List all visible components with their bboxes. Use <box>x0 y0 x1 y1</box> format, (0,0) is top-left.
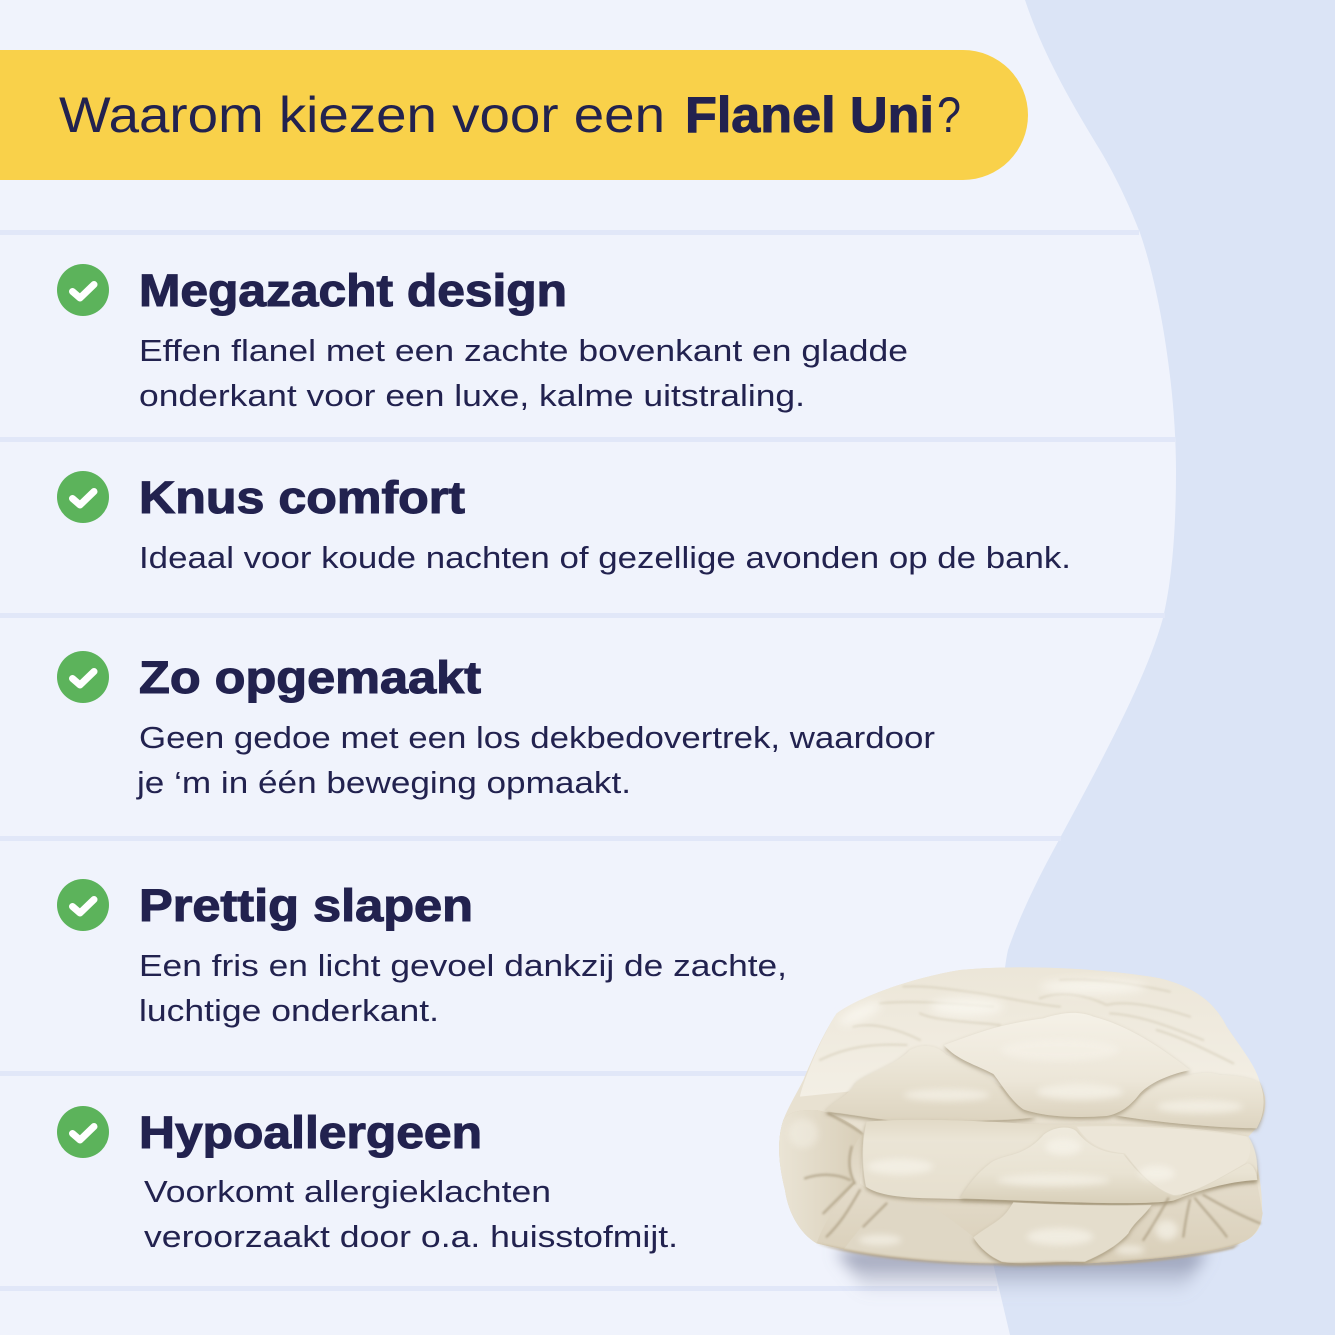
blanket big centre puff <box>944 1013 1190 1117</box>
blanket left pleats <box>805 1113 1260 1240</box>
body text <box>139 948 787 1028</box>
blanket upper right band <box>1113 1073 1264 1128</box>
folded blanket illustration <box>779 967 1265 1293</box>
body text <box>144 1174 678 1254</box>
separators <box>0 230 1175 1291</box>
blanket lower layer <box>779 1110 1263 1263</box>
title: Flanel Uni <box>685 87 934 143</box>
blanket lower edge shading <box>817 1243 1240 1265</box>
title: Waarom kiezen voor een <box>59 87 665 143</box>
body text: veroorzaakt door o.a. huisstofmijt. <box>144 1219 678 1254</box>
body text: Ideaal voor koude nachten of gezellige avonden op de bank. <box>139 540 1071 575</box>
body text: Effen flanel met een zachte bovenkant en gladde <box>139 333 908 368</box>
body text: Een fris en licht gevoel dankzij de zachte, <box>139 948 787 983</box>
item: Hypoallergeen <box>57 1106 678 1254</box>
heading: Knus comfort <box>139 472 465 523</box>
blanket middle front puff <box>960 1128 1257 1203</box>
blanket left roll end <box>779 1110 860 1243</box>
blanket top surface <box>800 967 1260 1097</box>
heading: Hypoallergeen <box>139 1107 482 1158</box>
blanket middle roll right surface <box>1077 1126 1250 1195</box>
body text: Voorkomt allergieklachten <box>144 1174 551 1209</box>
body text <box>136 720 935 800</box>
icon: check <box>57 879 109 931</box>
item: Prettig slapen <box>57 879 787 1028</box>
heading: Zo opgemaakt <box>139 652 481 703</box>
blanket middle roll left <box>863 1120 1257 1202</box>
item: Knus comfort <box>57 471 1071 575</box>
body text: onderkant voor een luxe, kalme uitstraling. <box>139 378 805 413</box>
blanket upper left band <box>825 1046 1037 1121</box>
title: ? <box>937 87 961 143</box>
body text: je ‘m in één beweging opmaakt. <box>136 765 631 800</box>
icon: check <box>57 1106 109 1158</box>
icon: check <box>57 471 109 523</box>
item: Zo opgemaakt <box>57 651 935 800</box>
blanket base silhouette <box>779 967 1265 1263</box>
heading: Prettig slapen <box>139 880 473 931</box>
blanket bottom centre puff <box>973 1202 1152 1263</box>
body text <box>139 333 908 413</box>
blanket shadow <box>837 1250 1207 1293</box>
title banner <box>0 50 1028 180</box>
icon: check <box>57 264 109 316</box>
item: Megazacht design <box>57 264 908 413</box>
blanket top highlights <box>836 979 1147 1030</box>
icon: check <box>57 651 109 703</box>
blanket velvet highlights <box>788 1039 1243 1255</box>
blanket top soft folds <box>820 980 1233 1063</box>
heading: Megazacht design <box>139 265 567 316</box>
body text: Geen gedoe met een los dekbedovertrek, waardoor <box>139 720 935 755</box>
body text: luchtige onderkant. <box>139 993 439 1028</box>
blanket bottom left puff <box>843 1202 1000 1263</box>
